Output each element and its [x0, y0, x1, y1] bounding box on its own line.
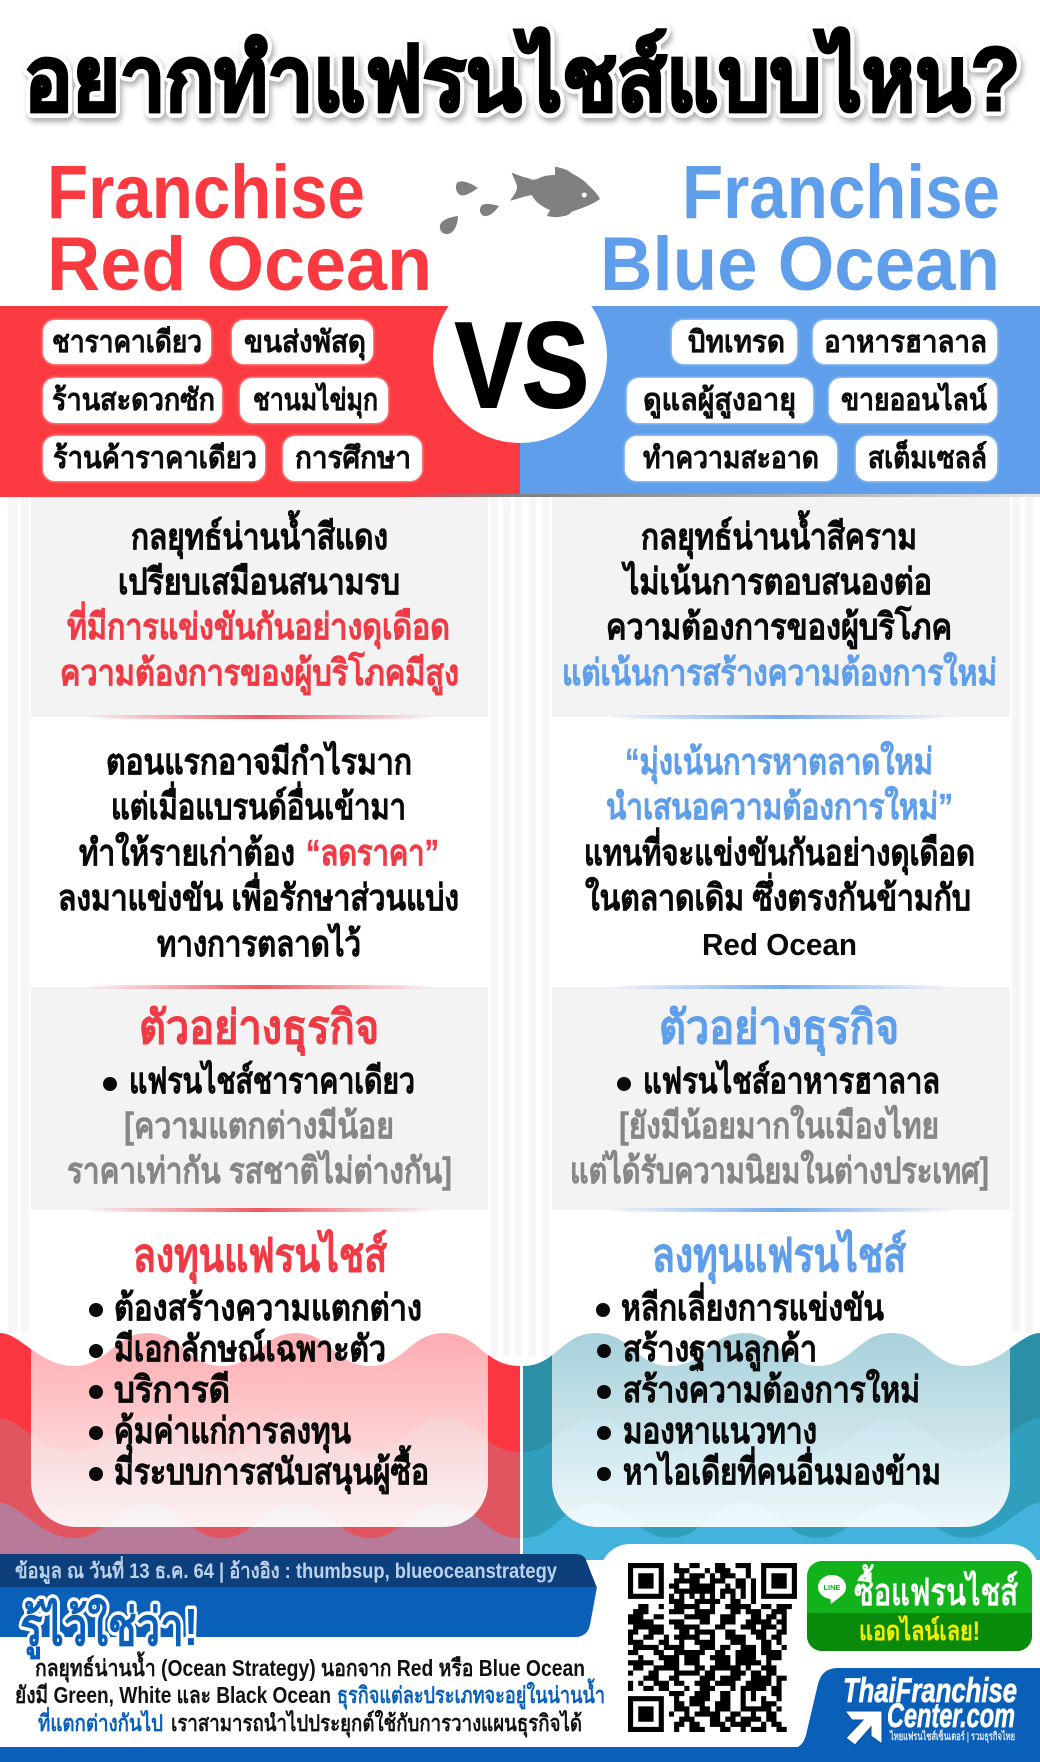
footer: white base [0, 1637, 800, 1748]
footer: source bar: ข้อมูล ณ วันที่ 13 ธ.ค. 64 | อ้างอิง : thumbsup, blueoceanstrategy [15, 1555, 557, 1585]
text: blue ocean investing: ลงทุนแฟรนไชส์ [652, 1229, 907, 1284]
text: red ocean investing: คุ้มค่าแก่การลงทุน [114, 1410, 351, 1454]
icon: fish and droplets [440, 167, 600, 234]
chips: red ocean businesses: การศึกษา [295, 442, 411, 475]
footer: did you know text: ธุรกิจแต่ละประเภทจะอยู่ในน่านน้ำ [337, 1678, 605, 1710]
footer: did you know text [15, 1651, 605, 1738]
text: blue ocean business example: [ยังมีน้อยมากในเมืองไทย [619, 1104, 939, 1146]
panel: blue ocean column [552, 497, 1010, 1527]
chips: red ocean businesses: ชานมไข่มุก [253, 382, 378, 419]
waves: blue side [520, 1333, 1040, 1560]
heading: Franchise Blue Ocean: Blue Ocean [600, 222, 1000, 307]
chips: red ocean businesses [43, 320, 422, 481]
text: red ocean strategy: กลยุทธ์น่านน้ำสีแดง [131, 510, 388, 560]
text: blue ocean investing: หลีกเลี่ยงการแข่งขัน [621, 1282, 884, 1328]
chips: blue ocean businesses: บิทเทรด [688, 326, 785, 359]
text: blue ocean investing: หาไอเดียที่คนอื่นมองข้าม [623, 1446, 941, 1492]
VS badge: VS [455, 297, 589, 433]
footer: white card [600, 1544, 1040, 1748]
text: red ocean price war: ทำให้รายเก่าต้อง [79, 831, 295, 873]
text: red ocean business example: แฟรนไชส์ชาราคาเดียว [129, 1059, 415, 1101]
text: red ocean price war: ทางการตลาดไว้ [157, 922, 361, 964]
heading: Franchise Red Ocean: Franchise [47, 150, 365, 235]
footer: did you know heading: รู้ไว้ใช่ว่า! [20, 1597, 198, 1660]
text: blue ocean investing: สร้างฐานลูกค้า [623, 1328, 817, 1372]
chips: red ocean businesses: ชาราคาเดียว [52, 326, 202, 359]
text: blue ocean strategy: ไม่เน้นการตอบสนองต่อ [621, 560, 932, 602]
LINE button [807, 1561, 1032, 1651]
footer: did you know text: ยังมี Green, White และ Black Ocean [15, 1682, 331, 1708]
text: blue ocean new market: ในตลาดเดิม ซึ่งตรงกันข้ามกับ [585, 872, 971, 918]
text: blue ocean investing: สร้างความต้องการใหม่ [623, 1368, 920, 1410]
text: blue ocean new market: “มุ่งเน้นการหาตลาดใหม่ [625, 740, 933, 785]
text: red ocean investing: ลงทุนแฟรนไชส์ [133, 1229, 388, 1284]
bottom bar [0, 1747, 1040, 1762]
chips: blue ocean businesses: ทำความสะอาด [643, 442, 819, 475]
text: red ocean strategy [60, 510, 459, 696]
icon: logo arrow [845, 1711, 882, 1745]
text: red ocean price war [58, 740, 459, 964]
waves: red side [0, 1333, 520, 1560]
text: red ocean business example [67, 1001, 452, 1191]
text: blue ocean business example: ตัวอย่างธุรกิจ [659, 1001, 899, 1056]
icon: LINE bubble [818, 1575, 846, 1604]
text: blue ocean business example: แฟรนไชส์อาหารฮาลาล [643, 1059, 940, 1101]
text: red ocean strategy: ที่มีการแข่งขันกันอย่างดุเดือด [67, 601, 450, 650]
text: red ocean investing: ต้องสร้างความแตกต่าง [114, 1287, 422, 1328]
text: red ocean investing: มีระบบการสนับสนุนผู้ซื้อ [114, 1445, 429, 1495]
text: red ocean business example: ราคาเท่ากัน รสชาติไม่ต่างกัน] [67, 1149, 452, 1191]
text: red ocean investing: บริการดี [114, 1369, 230, 1410]
heading: Franchise Red Ocean: Red Ocean [47, 222, 432, 307]
panel: red band [0, 306, 520, 497]
text: red ocean business example: ตัวอย่างธุรกิจ [139, 1001, 379, 1056]
chips: red ocean businesses: ร้านสะดวกซัก [52, 384, 215, 417]
chips: blue ocean businesses: อาหารฮาลาล [824, 326, 987, 359]
text: red ocean business example: [ความแตกต่างมีน้อย [124, 1105, 394, 1146]
text: blue ocean investing [596, 1229, 941, 1492]
text: blue ocean investing: มองหาแนวทาง [623, 1410, 817, 1451]
chips: red ocean businesses: ร้านค้าราคาเดียว [53, 442, 257, 475]
chips: blue ocean businesses: สเต็มเซลล์ [868, 439, 987, 475]
text: red ocean investing [89, 1229, 429, 1495]
text: blue ocean strategy: กลยุทธ์น่านน้ำสีคราม [641, 510, 917, 560]
chips: blue ocean businesses [625, 320, 997, 481]
text: blue ocean new market: Red Ocean [702, 927, 857, 962]
footer: did you know text: กลยุทธ์น่านน้ำ (Ocean Strategy) นอกจาก Red หรือ Blue Ocean [35, 1651, 585, 1683]
text: red ocean price war: “ลดราคา” [306, 832, 439, 873]
heading: Franchise Red Ocean [47, 150, 432, 307]
band bottom shade line [400, 494, 1040, 497]
chips: red ocean businesses: ขนส่งพัสดุ [244, 326, 366, 361]
text: red ocean strategy: เปรียบเสมือนสนามรบ [118, 561, 400, 602]
footer: did you know text: ที่แตกต่างกันไป [38, 1706, 163, 1736]
heading: Franchise Blue Ocean [600, 150, 1000, 307]
logo: ThaiFranchise Center.com [795, 1668, 1040, 1748]
text: blue ocean new market: นำเสนอความต้องการใหม่” [606, 785, 953, 827]
footer: source bar [0, 1554, 597, 1588]
text: blue ocean new market [584, 740, 975, 962]
panel: blue band [520, 306, 1040, 494]
LINE button: แอดไลน์เลย! [859, 1615, 980, 1646]
VS badge [433, 269, 607, 443]
chips: blue ocean businesses: ดูแลผู้สูงอายุ [643, 384, 796, 419]
icon: LINE bubble: LINE [823, 1583, 841, 1592]
text: red ocean strategy: ความต้องการของผู้บริโภคมีสูง [60, 651, 459, 696]
panel: red ocean column [31, 497, 488, 1527]
background stripes [8, 497, 1033, 1357]
text: blue ocean strategy: ความต้องการของผู้บริโภค [606, 605, 952, 650]
text: red ocean price war: ตอนแรกอาจมีกำไรมาก [106, 740, 412, 782]
text: red ocean price war: แต่เมื่อแบรนด์อื่นเข้ามา [111, 781, 406, 827]
footer: did you know text: เราสามารถนำไปประยุกต์ใช้กับการวางแผนธุรกิจได้ [171, 1709, 582, 1738]
text: blue ocean strategy [562, 510, 997, 693]
QR code [628, 1563, 802, 1732]
text: red ocean price war: ลงมาแข่งขัน เพื่อรักษาส่วนแบ่ง [58, 872, 459, 918]
text: red ocean investing: มีเอกลักษณ์เฉพาะตัว [114, 1328, 386, 1369]
heading: Franchise Blue Ocean: Franchise [682, 150, 1000, 235]
footer: blue banner [0, 1587, 597, 1637]
chips: blue ocean businesses: ขายออนไลน์ [841, 382, 987, 417]
text: blue ocean business example [570, 1001, 989, 1191]
